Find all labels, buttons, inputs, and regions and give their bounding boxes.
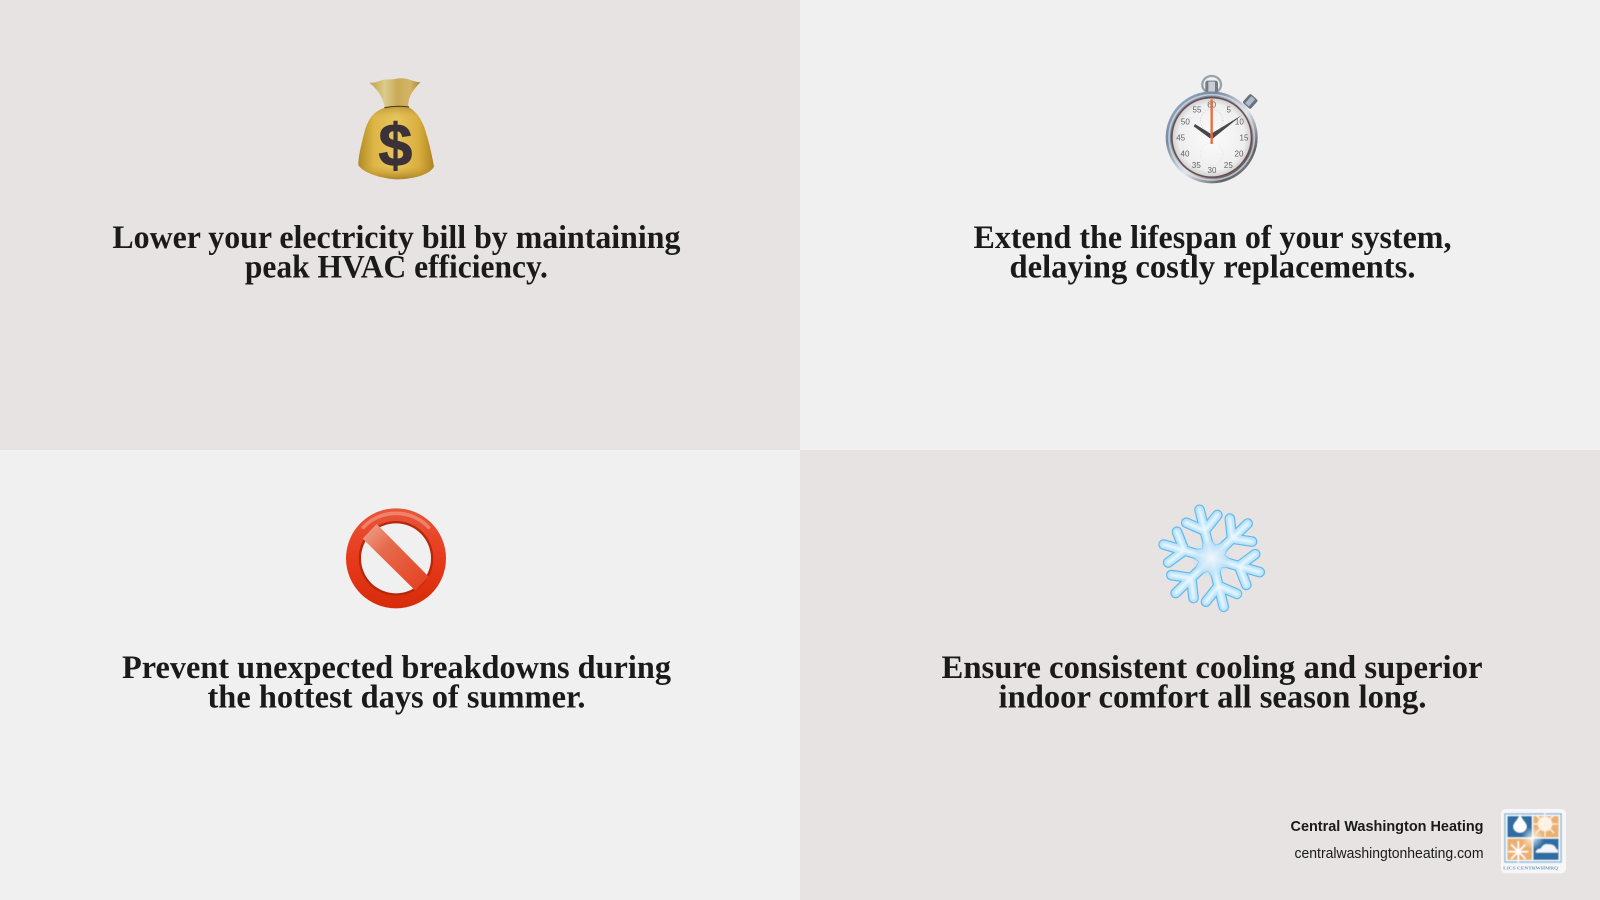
icon: stopwatch: 35	[1192, 161, 1201, 170]
icon: stopwatch: 20	[1235, 149, 1244, 158]
icon: stopwatch	[1166, 76, 1258, 183]
heading: prevent breakdowns: the hottest days of summer.	[208, 680, 586, 716]
heading: extend system lifespan: delaying costly replacements.	[1010, 250, 1416, 286]
brand block	[1290, 809, 1566, 873]
icon: stopwatch: 15	[1240, 133, 1249, 142]
heading: prevent breakdowns	[122, 650, 671, 716]
heading: consistent cooling: indoor comfort all season long.	[998, 680, 1426, 716]
heading: lower electricity bill: peak HVAC efficiency.	[245, 250, 548, 286]
icon: stopwatch: 60	[1207, 101, 1217, 110]
icon: stopwatch: 25	[1224, 161, 1233, 170]
heading: lower electricity bill: Lower your electricity bill by maintaining	[112, 220, 681, 256]
heading: extend system lifespan	[974, 220, 1452, 286]
icon: money bag: $	[378, 111, 412, 179]
icon: stopwatch: 45	[1176, 133, 1186, 142]
icon: stopwatch: 10	[1235, 117, 1244, 126]
icon: stopwatch: 30	[1208, 166, 1217, 175]
icon: stopwatch: 50	[1181, 117, 1190, 126]
icon: stopwatch: 55	[1193, 105, 1202, 114]
logo: LICS CENTRWHMRQ	[1503, 865, 1559, 870]
icon: money bag	[358, 78, 434, 179]
heading: extend system lifespan: Extend the lifespan of your system,	[974, 220, 1452, 256]
heading: lower electricity bill	[112, 220, 681, 286]
heading: prevent breakdowns: Prevent unexpected breakdowns during	[122, 650, 671, 686]
brand url: centralwashingtonheating.com	[1294, 846, 1484, 862]
icon: snowflake	[1150, 497, 1274, 619]
panel: consistent cooling	[800, 450, 1600, 900]
icon: stopwatch: 40	[1181, 149, 1190, 158]
icon: prohibited sign	[346, 508, 446, 608]
panel: lower electricity bill	[0, 0, 800, 450]
brand name: Central Washington Heating	[1290, 818, 1484, 835]
panel: prevent breakdowns	[0, 450, 800, 900]
panel: extend system lifespan	[800, 0, 1600, 450]
heading: consistent cooling: Ensure consistent cooling and superior	[942, 650, 1482, 686]
logo	[1501, 809, 1566, 873]
icon: stopwatch: 5	[1226, 105, 1231, 114]
heading: consistent cooling	[942, 650, 1482, 716]
